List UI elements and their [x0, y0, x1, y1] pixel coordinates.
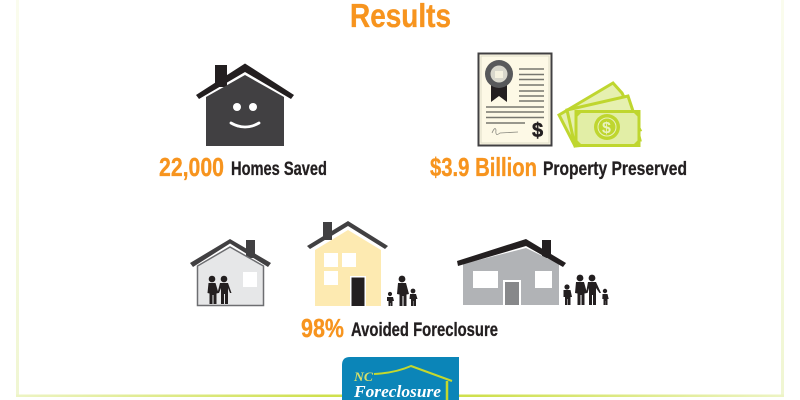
stat: avoided foreclosure: Avoided Foreclosure: [351, 320, 498, 341]
stat: homes saved: Homes Saved: [231, 159, 327, 180]
icon: couple: [208, 276, 232, 304]
stat: homes saved: 22,000: [159, 152, 224, 182]
icon: certificate: $: [532, 120, 543, 142]
icon: large grey ranch house with family: [457, 239, 609, 305]
icon: small grey house with couple: [190, 239, 271, 306]
icon: money: [559, 83, 640, 146]
icon: family of four: [564, 275, 609, 305]
icon: family of three: [387, 276, 418, 306]
icon: money: $: [602, 120, 611, 137]
stat: homes saved: [159, 152, 327, 182]
logo: NC Foreclosure: [342, 357, 459, 400]
stat: avoided foreclosure: [301, 313, 498, 343]
stat: property preserved: $3.9 Billion: [430, 152, 537, 182]
icon: certificate: [478, 54, 552, 146]
icon: yellow house with parent and children: [307, 221, 418, 306]
stat: avoided foreclosure: 98%: [301, 313, 344, 343]
icon: smiling house: [196, 64, 294, 146]
stat: property preserved: Property Preserved: [543, 159, 687, 180]
stat: property preserved: [430, 152, 687, 182]
logo: NC Foreclosure: NC: [353, 369, 373, 384]
